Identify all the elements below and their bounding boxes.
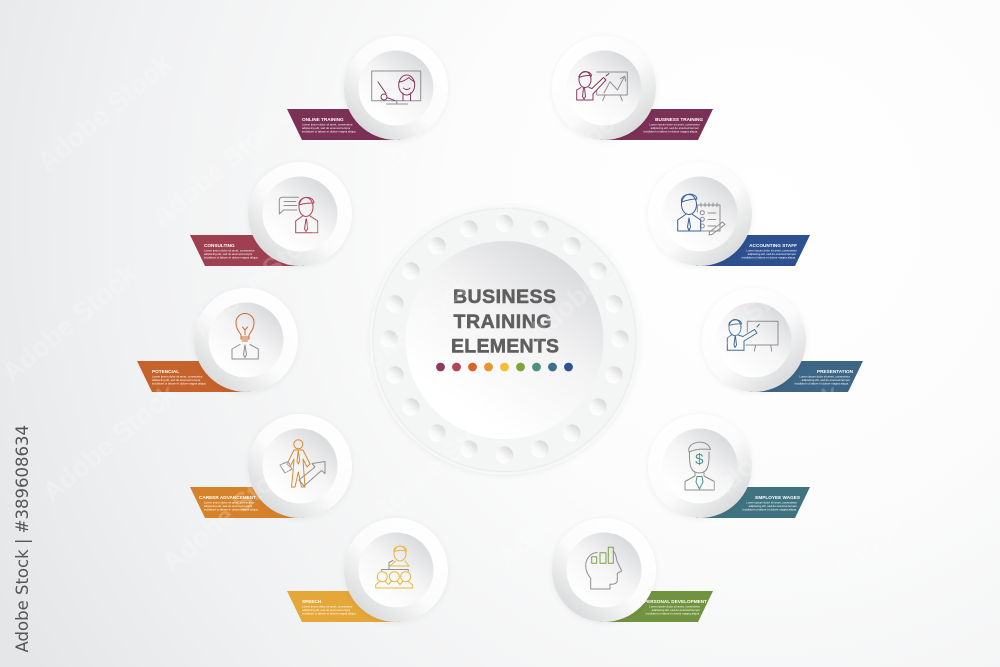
disc <box>248 414 352 518</box>
label text: PRESENTATION <box>817 369 854 374</box>
icon: speaker and audience <box>376 546 413 588</box>
label text: CONSULTING <box>204 243 235 248</box>
icon: head with growth bars <box>586 547 622 589</box>
watermark: Adobe Stock <box>486 98 633 228</box>
watermark: Adobe Stock <box>841 233 988 363</box>
disc <box>248 162 352 266</box>
disc <box>552 518 656 622</box>
label ribbon <box>696 235 810 266</box>
label text: incididunt ut labore et dolore magna aliqua. <box>204 256 259 260</box>
colour dots <box>436 363 573 371</box>
icon: teacher on monitor <box>372 71 421 104</box>
panel: personal development <box>552 518 713 622</box>
label text: incididunt ut labore et dolore magna aliqua. <box>152 382 207 386</box>
watermark: Adobe Stock <box>331 268 478 398</box>
watermark: Adobe Stock <box>146 103 293 233</box>
title: BUSINESS <box>453 286 556 308</box>
label text: adipiscing elit, sed do eiusmod tempor <box>204 504 252 508</box>
label text: adipiscing elit, sed do eiusmod tempor <box>302 608 350 612</box>
label text <box>199 495 259 512</box>
icon: person with light bulb head <box>232 314 258 359</box>
label text: POTENCIAL <box>152 369 179 374</box>
label ribbon <box>190 487 304 518</box>
label text: ACCOUNTING STAFF <box>749 243 797 248</box>
watermark: Adobe Stock <box>826 458 973 588</box>
hub inner disc <box>406 241 604 439</box>
disc <box>194 288 298 392</box>
disc <box>648 162 752 266</box>
disc <box>344 518 448 622</box>
label text: Lorem ipsum dolor sit amet, consectetur <box>204 248 255 252</box>
title: TRAINING <box>454 311 552 333</box>
label ribbon <box>287 591 400 622</box>
label text: adipiscing elit, sed do eiusmod tempor <box>652 608 700 612</box>
label ribbon <box>696 487 810 518</box>
label text: adipiscing elit, sed do eiusmod tempor <box>748 252 796 256</box>
title <box>451 286 559 358</box>
disc <box>702 288 806 392</box>
label text: adipiscing elit, sed do eiusmod tempor <box>802 378 850 382</box>
label text <box>302 599 357 616</box>
label text <box>204 243 259 260</box>
label text: Lorem ipsum dolor sit amet, consectetur <box>746 248 797 252</box>
label text: incididunt ut labore et dolore magna aliqua. <box>795 382 849 386</box>
label text: adipiscing elit, sed do eiusmod tempor <box>302 126 350 130</box>
label text: incididunt ut labore et dolore magna aliqua. <box>742 256 796 260</box>
panel: speech <box>287 518 448 622</box>
panel: presentation <box>702 288 863 392</box>
panel: central hub <box>370 206 638 474</box>
panel: consulting <box>190 162 352 266</box>
icon: accountant with notepad <box>678 194 725 235</box>
label text: ONLINE TRAINING <box>302 117 344 122</box>
label text: incididunt ut labore et dolore magna aliqua. <box>644 130 698 134</box>
label text: Lorem ipsum dolor sit amet, consectetur <box>799 374 850 378</box>
watermark: Adobe Stock <box>156 448 303 578</box>
icon: consultant with speech bubble <box>279 197 318 233</box>
label text: incididunt ut labore et dolore magna aliqua. <box>302 130 357 134</box>
disc <box>648 414 752 518</box>
watermark: Adobe Stock <box>701 378 848 508</box>
panel: business training <box>552 36 713 140</box>
label text: Lorem ipsum dolor sit amet, consectetur <box>302 604 353 608</box>
label ribbon <box>137 361 250 392</box>
panel: accounting staff <box>648 162 810 266</box>
label text: Lorem ipsum dolor sit amet, consectetur <box>302 122 353 126</box>
label text: Lorem ipsum dolor sit amet, consectetur <box>152 374 203 378</box>
label text <box>742 243 797 260</box>
label text: Lorem ipsum dolor sit amet, consectetur <box>649 604 700 608</box>
label text: Lorem ipsum dolor sit amet, consectetur <box>204 500 255 504</box>
label ribbon <box>190 235 304 266</box>
label text: EMPLOYEE WAGES <box>755 495 800 500</box>
panel: career advancement <box>190 414 352 518</box>
label text: CAREER ADVANCEMENT <box>199 495 256 500</box>
watermark: Adobe Stock <box>491 443 638 573</box>
label text <box>743 495 800 512</box>
label text: BUSINESS TRAINING <box>655 117 703 122</box>
label ribbon <box>600 109 713 140</box>
watermark: Adobe Stock <box>699 53 846 183</box>
watermark: Adobe Stock <box>819 113 966 243</box>
label text: Lorem ipsum dolor sit amet, consectetur <box>746 500 797 504</box>
watermark: Adobe Stock <box>36 378 183 508</box>
label text: Lorem ipsum dolor sit amet, consectetur <box>649 122 700 126</box>
label text <box>302 117 357 134</box>
icon: trainer with chart board <box>577 72 627 101</box>
label ribbon <box>750 361 863 392</box>
label text: PERSONAL DEVELOPMENT <box>644 599 707 604</box>
label text: incididunt ut labore et dolore magna aliqua. <box>204 508 259 512</box>
label text <box>795 369 854 386</box>
label text: adipiscing elit, sed do eiusmod tempor <box>749 504 797 508</box>
icon: dollar sign: $ <box>695 451 704 468</box>
icon: businessman with rising arrow <box>280 440 325 487</box>
label text: incididunt ut labore et dolore magna aliqua. <box>743 508 797 512</box>
hub holes <box>380 215 629 464</box>
watermark <box>0 48 988 588</box>
label text: adipiscing elit, sed do eiusmod tempor <box>651 126 699 130</box>
label text: incididunt ut labore et dolore magna aliqua. <box>646 612 700 616</box>
label text: SPEECH <box>302 599 322 604</box>
watermark: Adobe Stock <box>366 398 513 528</box>
disc <box>344 36 448 140</box>
label text <box>152 369 207 386</box>
watermark: Adobe Stock <box>366 53 513 183</box>
label text <box>644 117 703 134</box>
panel: employee wages <box>648 414 810 518</box>
watermark: Adobe Stock <box>186 213 333 343</box>
label text: adipiscing elit, sed do eiusmod tempor <box>204 252 252 256</box>
watermark: Adobe Stock <box>0 258 143 388</box>
hub outer ring <box>370 206 638 474</box>
icon: presenter at whiteboard <box>727 320 778 351</box>
label ribbon <box>600 591 713 622</box>
watermark: Adobe Stock <box>666 258 813 388</box>
watermark: Adobe Stock <box>521 218 668 348</box>
panel: online training <box>287 36 448 140</box>
disc <box>552 36 656 140</box>
label text: incididunt ut labore et dolore magna aliqua. <box>302 612 357 616</box>
title: ELEMENTS <box>451 336 559 358</box>
stock id caption: Adobe Stock | #389608634 <box>13 425 32 652</box>
label text: adipiscing elit, sed do eiusmod tempor <box>152 378 200 382</box>
panel: potencial <box>137 288 298 392</box>
label text <box>644 599 707 616</box>
watermark: Adobe Stock <box>31 48 178 178</box>
label ribbon <box>287 109 400 140</box>
icon: employee with dollar sign <box>685 442 714 490</box>
